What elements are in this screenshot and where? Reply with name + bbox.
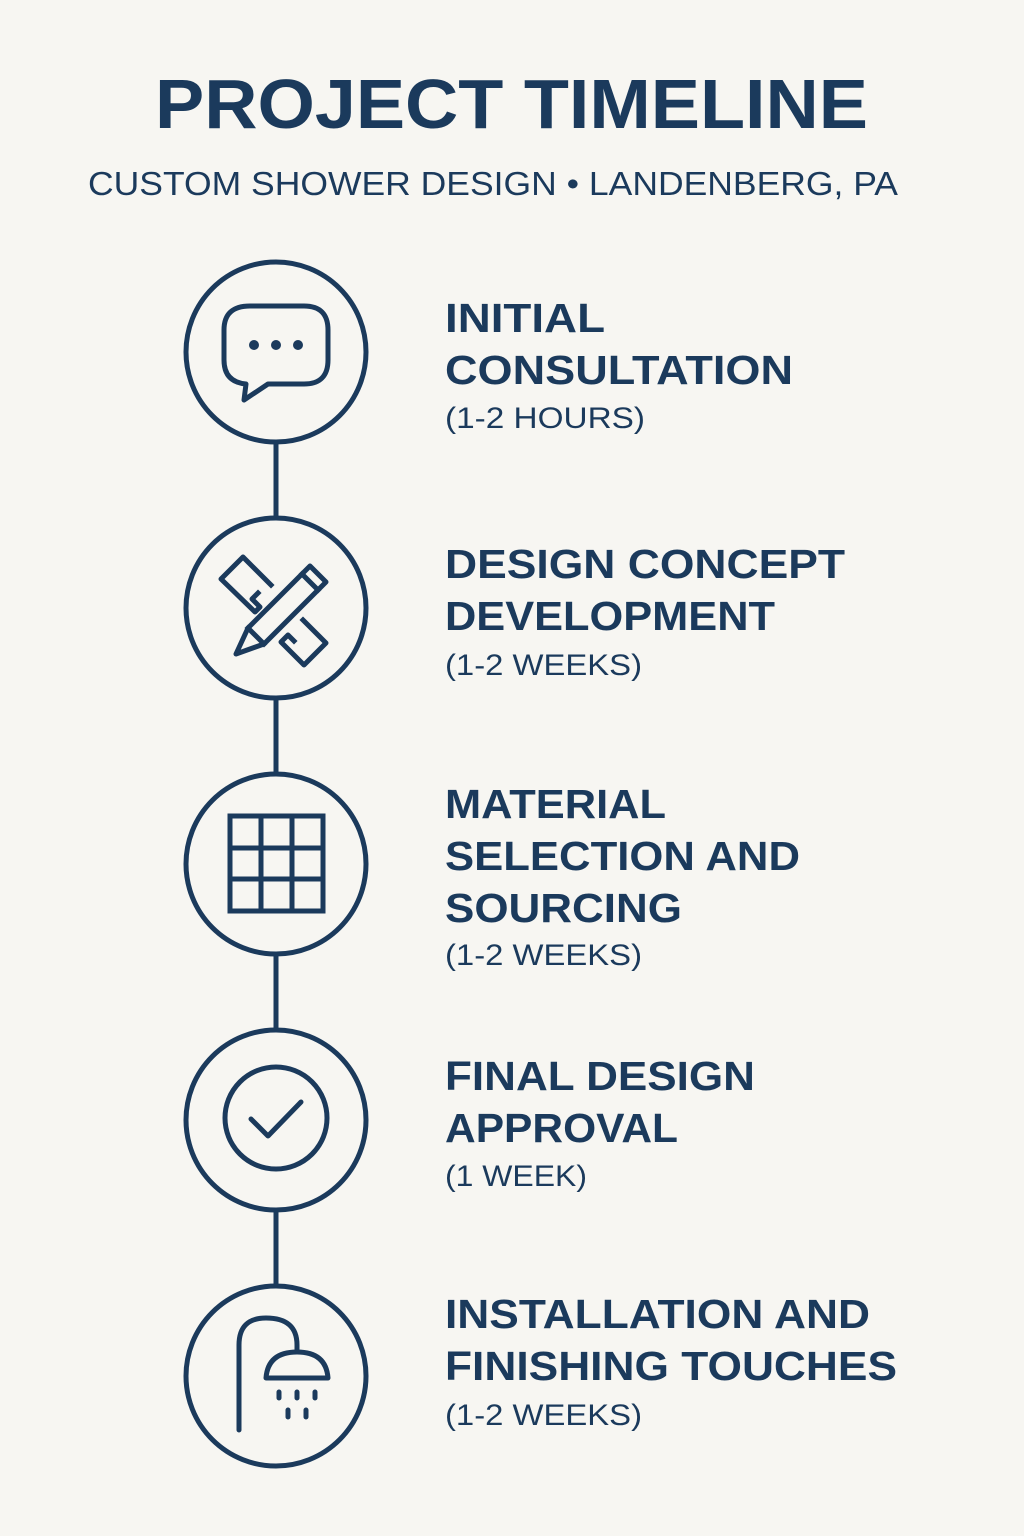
text: step 3: SELECTION AND xyxy=(445,833,800,879)
text: step 2: (1-2 WEEKS) xyxy=(445,649,642,682)
icon: check circle xyxy=(186,1030,366,1210)
text: step 2 xyxy=(445,541,845,682)
step 3: material selection xyxy=(186,774,800,972)
timeline connectors xyxy=(274,442,278,1286)
text: step 3: SOURCING xyxy=(445,885,682,931)
icon: chat bubble xyxy=(186,262,366,442)
title: PROJECT TIMELINE xyxy=(155,65,868,143)
text: step 4 xyxy=(445,1053,755,1193)
step 4: final approval xyxy=(186,1030,755,1210)
text: step 3: (1-2 WEEKS) xyxy=(445,939,642,972)
text: step 5: FINISHING TOUCHES xyxy=(445,1343,897,1389)
text: step 4: APPROVAL xyxy=(445,1105,678,1151)
text: step 1: INITIAL xyxy=(445,295,605,341)
text: step 1: (1-2 HOURS) xyxy=(445,402,645,435)
text: step 2: DESIGN CONCEPT xyxy=(445,541,845,587)
subtitle: CUSTOM SHOWER DESIGN • LANDENBERG, PA xyxy=(88,165,898,202)
text: step 4: (1 WEEK) xyxy=(445,1160,587,1193)
icon: ruler and pencil xyxy=(186,518,366,698)
text: step 5: (1-2 WEEKS) xyxy=(445,1399,642,1432)
step 5: installation xyxy=(186,1286,897,1466)
step 2: design concept xyxy=(186,518,845,698)
text: step 1 xyxy=(445,295,793,435)
text: step 3: MATERIAL xyxy=(445,781,666,827)
text: step 4: FINAL DESIGN xyxy=(445,1053,755,1099)
text: step 5: INSTALLATION AND xyxy=(445,1291,870,1337)
icon: shower head xyxy=(186,1286,366,1466)
text: step 2: DEVELOPMENT xyxy=(445,593,775,639)
text: step 1: CONSULTATION xyxy=(445,347,793,393)
text: step 3 xyxy=(445,781,800,972)
text: step 5 xyxy=(445,1291,897,1432)
icon: tile grid xyxy=(186,774,366,954)
step 1: initial consultation xyxy=(186,262,793,442)
